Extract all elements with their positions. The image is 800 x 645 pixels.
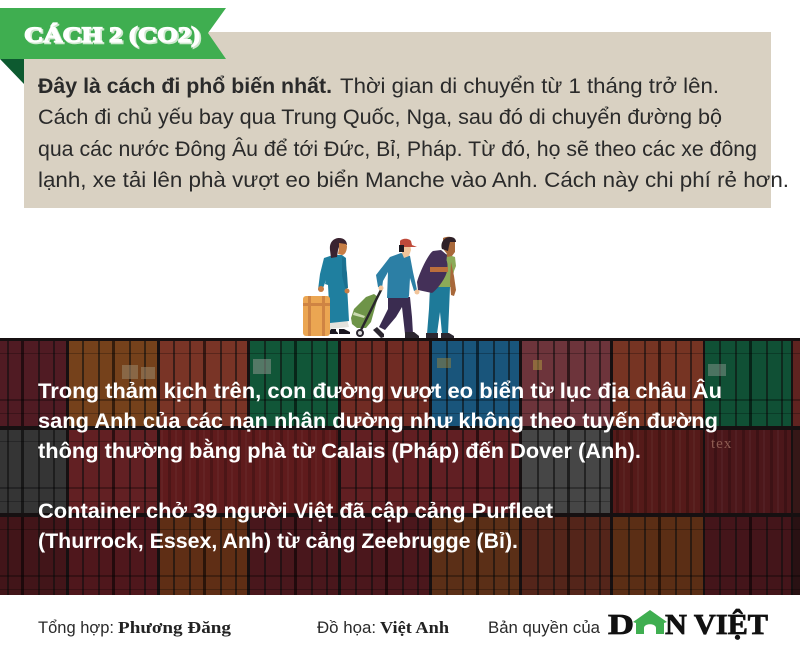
footer credits: graphics: Đồ họa: bbox=[317, 618, 376, 637]
footer credits: graphics bbox=[317, 618, 450, 637]
logo: Dan Viet: N VIỆT bbox=[665, 608, 768, 641]
footer credits: synthesis: Phương Đăng bbox=[118, 618, 232, 637]
text block: intro paragraph bbox=[38, 75, 789, 192]
panel: intro text background bbox=[24, 32, 771, 208]
ribbon: title banner bbox=[0, 8, 226, 84]
text block: explanation paragraph one: thông thường bằng phà từ Calais (Pháp) đến Dover (Anh). bbox=[38, 439, 641, 463]
footer credits: synthesis bbox=[38, 618, 232, 637]
text block: intro paragraph: qua các nước Đông Âu để tới Đức, Bỉ, Pháp. Từ đó, họ sẽ theo các xe đông bbox=[38, 138, 757, 161]
background: stacked shipping containers bbox=[0, 338, 800, 595]
footer credits: copyright: Bản quyền của bbox=[488, 618, 601, 637]
footer credits: synthesis: Tổng hợp: bbox=[38, 618, 114, 637]
text block: explanation paragraph two bbox=[38, 500, 553, 553]
text block: explanation paragraph two: Container chở 39 người Việt đã cập cảng Purfleet bbox=[38, 500, 553, 523]
footer credits: graphics: Việt Anh bbox=[380, 618, 450, 637]
text block: explanation paragraph two: (Thurrock, Essex, Anh) từ cảng Zeebrugge (Bỉ). bbox=[38, 530, 518, 553]
logo: Dan Viet bbox=[608, 608, 768, 641]
icon: man with rolling bag bbox=[351, 239, 420, 338]
title: CÁCH 2 (CO2) bbox=[26, 24, 202, 48]
text block: explanation paragraph one: sang Anh của các nạn nhân dường như không theo tuyến đường bbox=[38, 410, 718, 433]
icon: man with backpack bbox=[417, 237, 456, 338]
text block: intro paragraph: lạnh, xe tải lên phà vượt eo biển Manche vào Anh. Cách này chi phí rẻ hơn. bbox=[38, 169, 789, 192]
text block: intro paragraph: Cách đi chủ yếu bay qua Trung Quốc, Nga, sau đó di chuyển đường bộ bbox=[38, 106, 722, 129]
text block: intro paragraph: Đây là cách đi phổ biến nhất. bbox=[38, 75, 332, 98]
container logo text: tex: tex bbox=[711, 436, 732, 452]
illustration: three travellers bbox=[303, 237, 456, 338]
text block: intro paragraph: Thời gian di chuyển từ 1 tháng trở lên. bbox=[340, 75, 719, 98]
title: CÁCH 2 (CO2) bbox=[24, 22, 200, 47]
icon: woman with suitcase bbox=[303, 238, 350, 336]
text block: explanation paragraph one: Trong thảm kịch trên, con đường vượt eo biển từ lục địa châu Âu bbox=[38, 379, 722, 403]
text block: explanation paragraph one bbox=[38, 379, 722, 463]
logo: Dan Viet: D bbox=[608, 609, 634, 641]
